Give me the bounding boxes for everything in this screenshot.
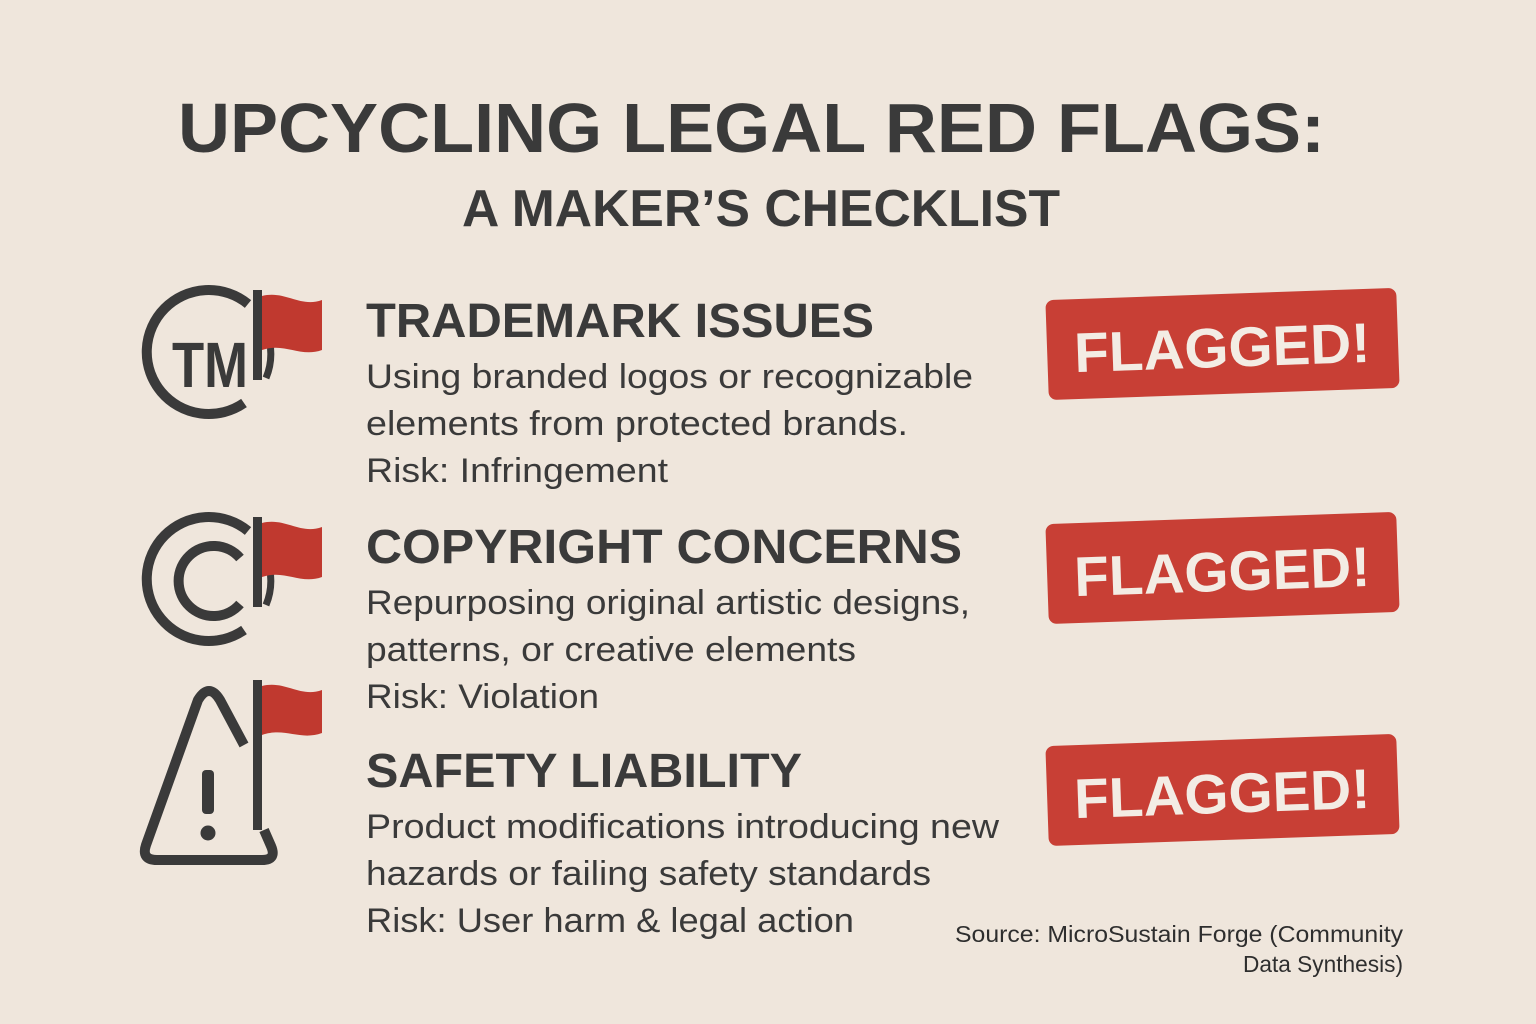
text: copyright description: patterns, or creative elements xyxy=(366,631,856,669)
title: UPCYCLING LEGAL RED FLAGS: xyxy=(178,89,1325,167)
stamp: flagged 2: FLAGGED! xyxy=(1073,535,1371,608)
text: copyright description: Risk: Violation xyxy=(366,678,599,716)
stamp: flagged 1: FLAGGED! xyxy=(1073,311,1371,384)
text: trademark description: elements from protected brands. xyxy=(366,405,908,443)
heading: copyright: COPYRIGHT CONCERNS xyxy=(366,521,962,574)
icon: copyright with flag xyxy=(147,517,322,641)
text: safety description: hazards or failing safety standards xyxy=(366,855,931,893)
icon: trademark with flag xyxy=(147,290,322,414)
text: trademark description xyxy=(366,358,973,490)
icon: trademark with flag: TM xyxy=(172,329,248,401)
heading: trademark: TRADEMARK ISSUES xyxy=(366,295,874,348)
row 2: copyright xyxy=(147,512,1400,716)
stamp: flagged 3: FLAGGED! xyxy=(1073,757,1371,830)
text: trademark description: Using branded logos or recognizable xyxy=(366,358,973,396)
row 3: safety xyxy=(145,680,1400,940)
text: trademark description: Risk: Infringement xyxy=(366,452,669,490)
text: safety description: Product modifications introducing new xyxy=(366,808,999,846)
source note: Data Synthesis) xyxy=(1243,951,1403,977)
text: copyright description xyxy=(366,584,970,716)
text: copyright description: Repurposing original artistic designs, xyxy=(366,584,970,622)
title xyxy=(178,89,1325,238)
row 1: trademark xyxy=(147,288,1400,490)
subtitle: A MAKER’S CHECKLIST xyxy=(462,180,1060,238)
icon: warning triangle with flag xyxy=(145,680,322,860)
source note: Source: MicroSustain Forge (Community xyxy=(955,921,1404,947)
text: safety description xyxy=(366,808,999,940)
stamp: flagged 2 xyxy=(1045,512,1400,624)
stamp: flagged 3 xyxy=(1045,734,1400,846)
heading: safety: SAFETY LIABILITY xyxy=(366,745,802,798)
stamp: flagged 1 xyxy=(1045,288,1400,400)
text: safety description: Risk: User harm & legal action xyxy=(366,902,854,940)
source note xyxy=(955,921,1404,977)
